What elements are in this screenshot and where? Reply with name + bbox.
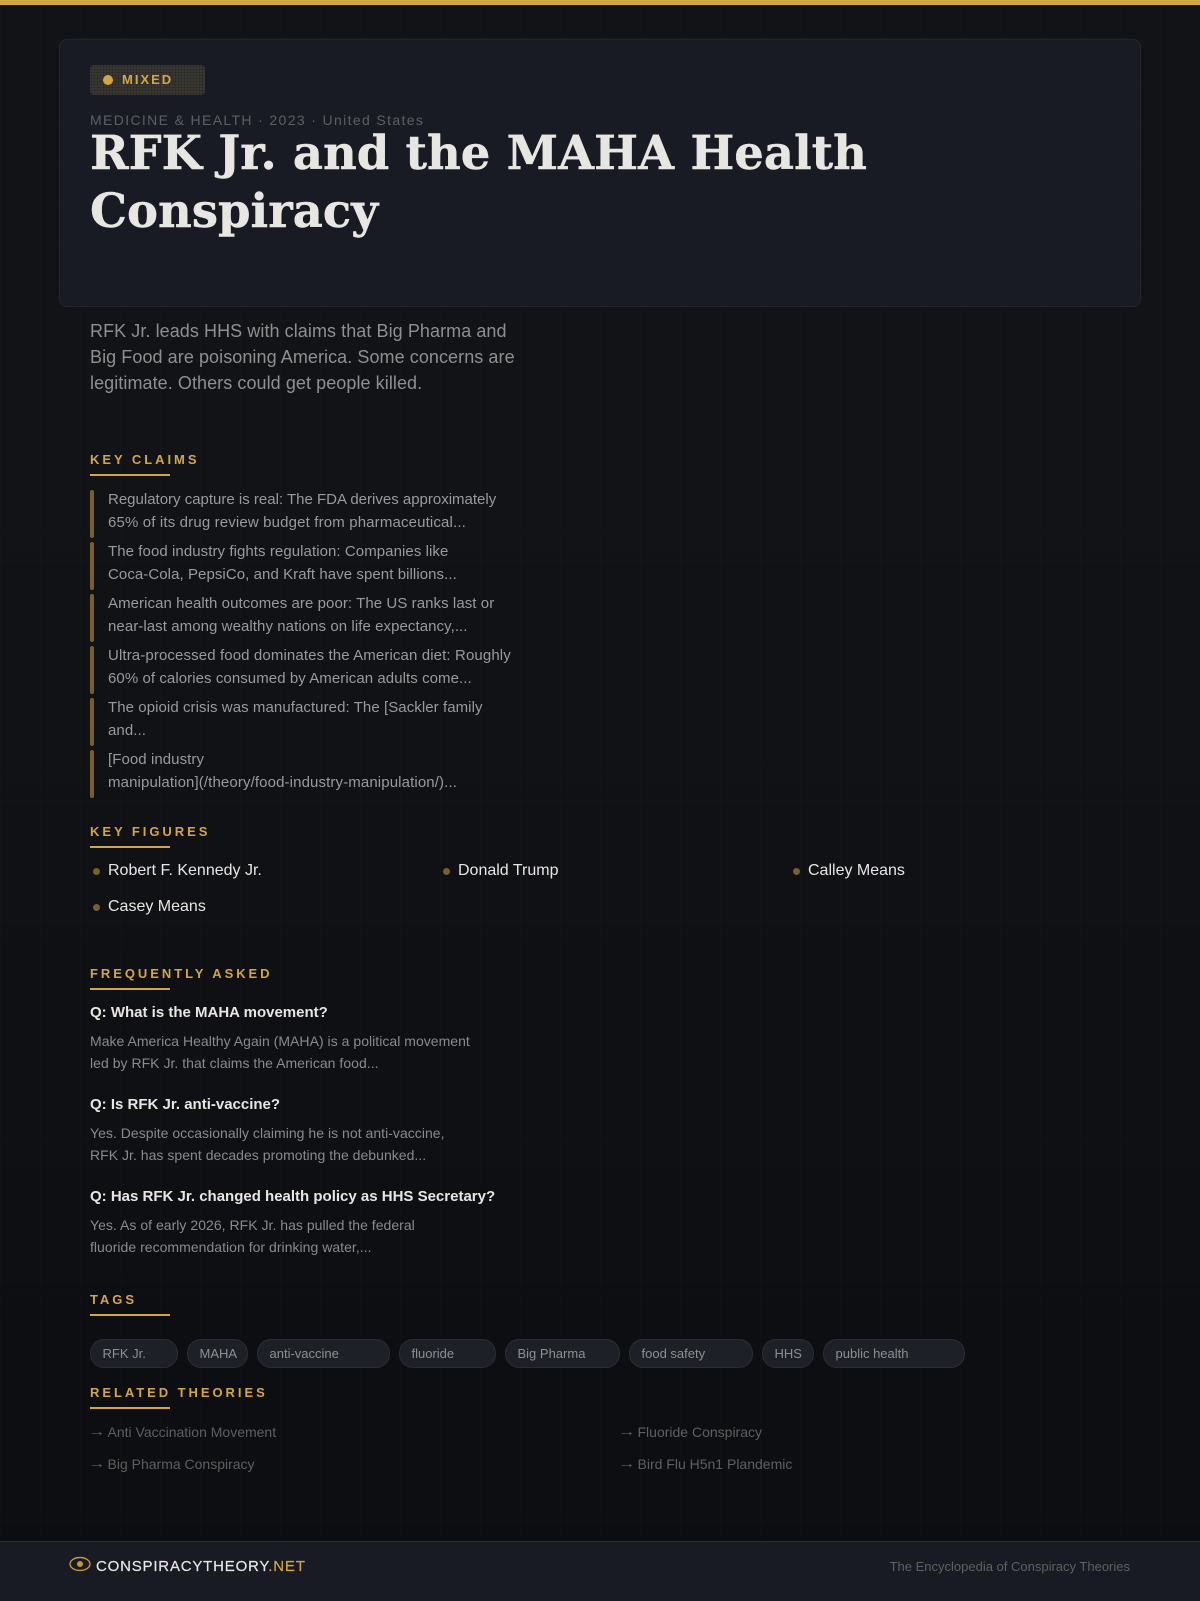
claim 1 [90, 490, 496, 538]
claim 2: Coca-Cola, PepsiCo, and Kraft have spent billions... [108, 566, 457, 582]
related link: → [618, 1455, 636, 1471]
faq 2 [90, 1096, 445, 1163]
tag: Big Pharma [518, 1346, 585, 1361]
claim 6 [90, 750, 457, 798]
tag [823, 1339, 965, 1368]
tag [629, 1339, 753, 1368]
summary: Big Food are poisoning America. Some concerns are [90, 347, 515, 367]
heading: key claims: KEY CLAIMS [90, 452, 199, 467]
title [90, 125, 867, 238]
related link: → [618, 1423, 636, 1439]
related link: Fluoride Conspiracy [638, 1424, 762, 1440]
claim 4: Ultra-processed food dominates the American diet: Roughly [108, 647, 511, 664]
tag [90, 1339, 178, 1368]
tag: public health [836, 1346, 908, 1361]
claim 3: near-last among wealthy nations on life expectancy,... [108, 618, 468, 634]
tag: anti-vaccine [270, 1346, 339, 1361]
tag: HHS [774, 1346, 802, 1361]
footer [0, 1541, 1200, 1601]
heading: frequently asked: FREQUENTLY ASKED [90, 966, 273, 981]
tag: RFK Jr. [102, 1346, 146, 1361]
faq 1: Q: What is the MAHA movement? [90, 1004, 328, 1021]
faq 1: Make America Healthy Again (MAHA) is a political movement [90, 1033, 470, 1049]
figure: Trump: Donald Trump [458, 862, 558, 879]
related link: Anti Vaccination Movement [108, 1424, 276, 1440]
claim 1: Regulatory capture is real: The FDA derives approximately [108, 491, 496, 508]
top accent bar [0, 0, 1200, 5]
claim 2 [90, 542, 457, 590]
badge dot [103, 75, 113, 85]
faq 3 [90, 1188, 495, 1255]
claim 2: The food industry fights regulation: Companies like [108, 543, 448, 560]
faq 1 [90, 1004, 470, 1071]
badge label: MIXED [122, 72, 173, 87]
claim 5: and... [108, 722, 146, 738]
claim 6: [Food industry [108, 751, 204, 768]
faq 3: Q: Has RFK Jr. changed health policy as HHS Secretary? [90, 1188, 495, 1205]
icon: eye logo [69, 1556, 91, 1572]
panel: header [59, 39, 1141, 307]
related link: Big Pharma Conspiracy [108, 1456, 255, 1472]
claim 5: The opioid crisis was manufactured: The [Sackler family [108, 699, 483, 716]
related link: → [88, 1423, 106, 1439]
tag [505, 1339, 620, 1368]
summary: RFK Jr. leads HHS with claims that Big Pharma and [90, 321, 507, 341]
claim 3 [90, 594, 494, 642]
tag [257, 1339, 390, 1368]
heading: tags: TAGS [90, 1292, 137, 1307]
tag [399, 1339, 496, 1368]
related link: Bird Flu H5n1 Plandemic [638, 1456, 792, 1472]
faq 2: Yes. Despite occasionally claiming he is not anti-vaccine, [90, 1125, 445, 1141]
tag [187, 1339, 248, 1368]
title: RFK Jr. and the MAHA Health [90, 125, 867, 180]
faq 2: Q: Is RFK Jr. anti-vaccine? [90, 1096, 280, 1113]
related link: → [88, 1455, 106, 1471]
title: Conspiracy [90, 183, 378, 238]
heading: related theories: RELATED THEORIES [90, 1385, 268, 1400]
tag [762, 1339, 814, 1368]
summary: legitimate. Others could get people killed. [90, 373, 422, 393]
verdict badge [90, 65, 205, 95]
claim 5 [90, 698, 483, 746]
figure: Calley Means: Calley Means [808, 862, 905, 879]
tag: MAHA [200, 1346, 237, 1361]
claim 1: 65% of its drug review budget from pharmaceutical... [108, 514, 466, 530]
heading: key figures: KEY FIGURES [90, 824, 210, 839]
claim 4: 60% of calories consumed by American adults come... [108, 670, 472, 686]
claim 6: manipulation](/theory/food-industry-manipulation/)... [108, 774, 457, 790]
faq 2: RFK Jr. has spent decades promoting the debunked... [90, 1147, 426, 1163]
claim 4 [90, 646, 511, 694]
category meta line: MEDICINE & HEALTH · 2023 · United States [90, 112, 424, 128]
claim 3: American health outcomes are poor: The US ranks last or [108, 595, 494, 612]
faq 3: fluoride recommendation for drinking water,... [90, 1239, 372, 1255]
summary [90, 321, 515, 393]
logo wordmark: CONSPIRACYTHEORY.NET [96, 1558, 306, 1575]
figure: Casey Means: Casey Means [108, 898, 206, 915]
faq 1: led by RFK Jr. that claims the American food... [90, 1055, 379, 1071]
faq 3: Yes. As of early 2026, RFK Jr. has pulled the federal [90, 1217, 415, 1233]
tagline: The Encyclopedia of Conspiracy Theories [890, 1559, 1130, 1574]
tag: fluoride [412, 1346, 454, 1361]
tag: food safety [642, 1346, 705, 1361]
figure: RFK Jr.: Robert F. Kennedy Jr. [108, 862, 262, 879]
